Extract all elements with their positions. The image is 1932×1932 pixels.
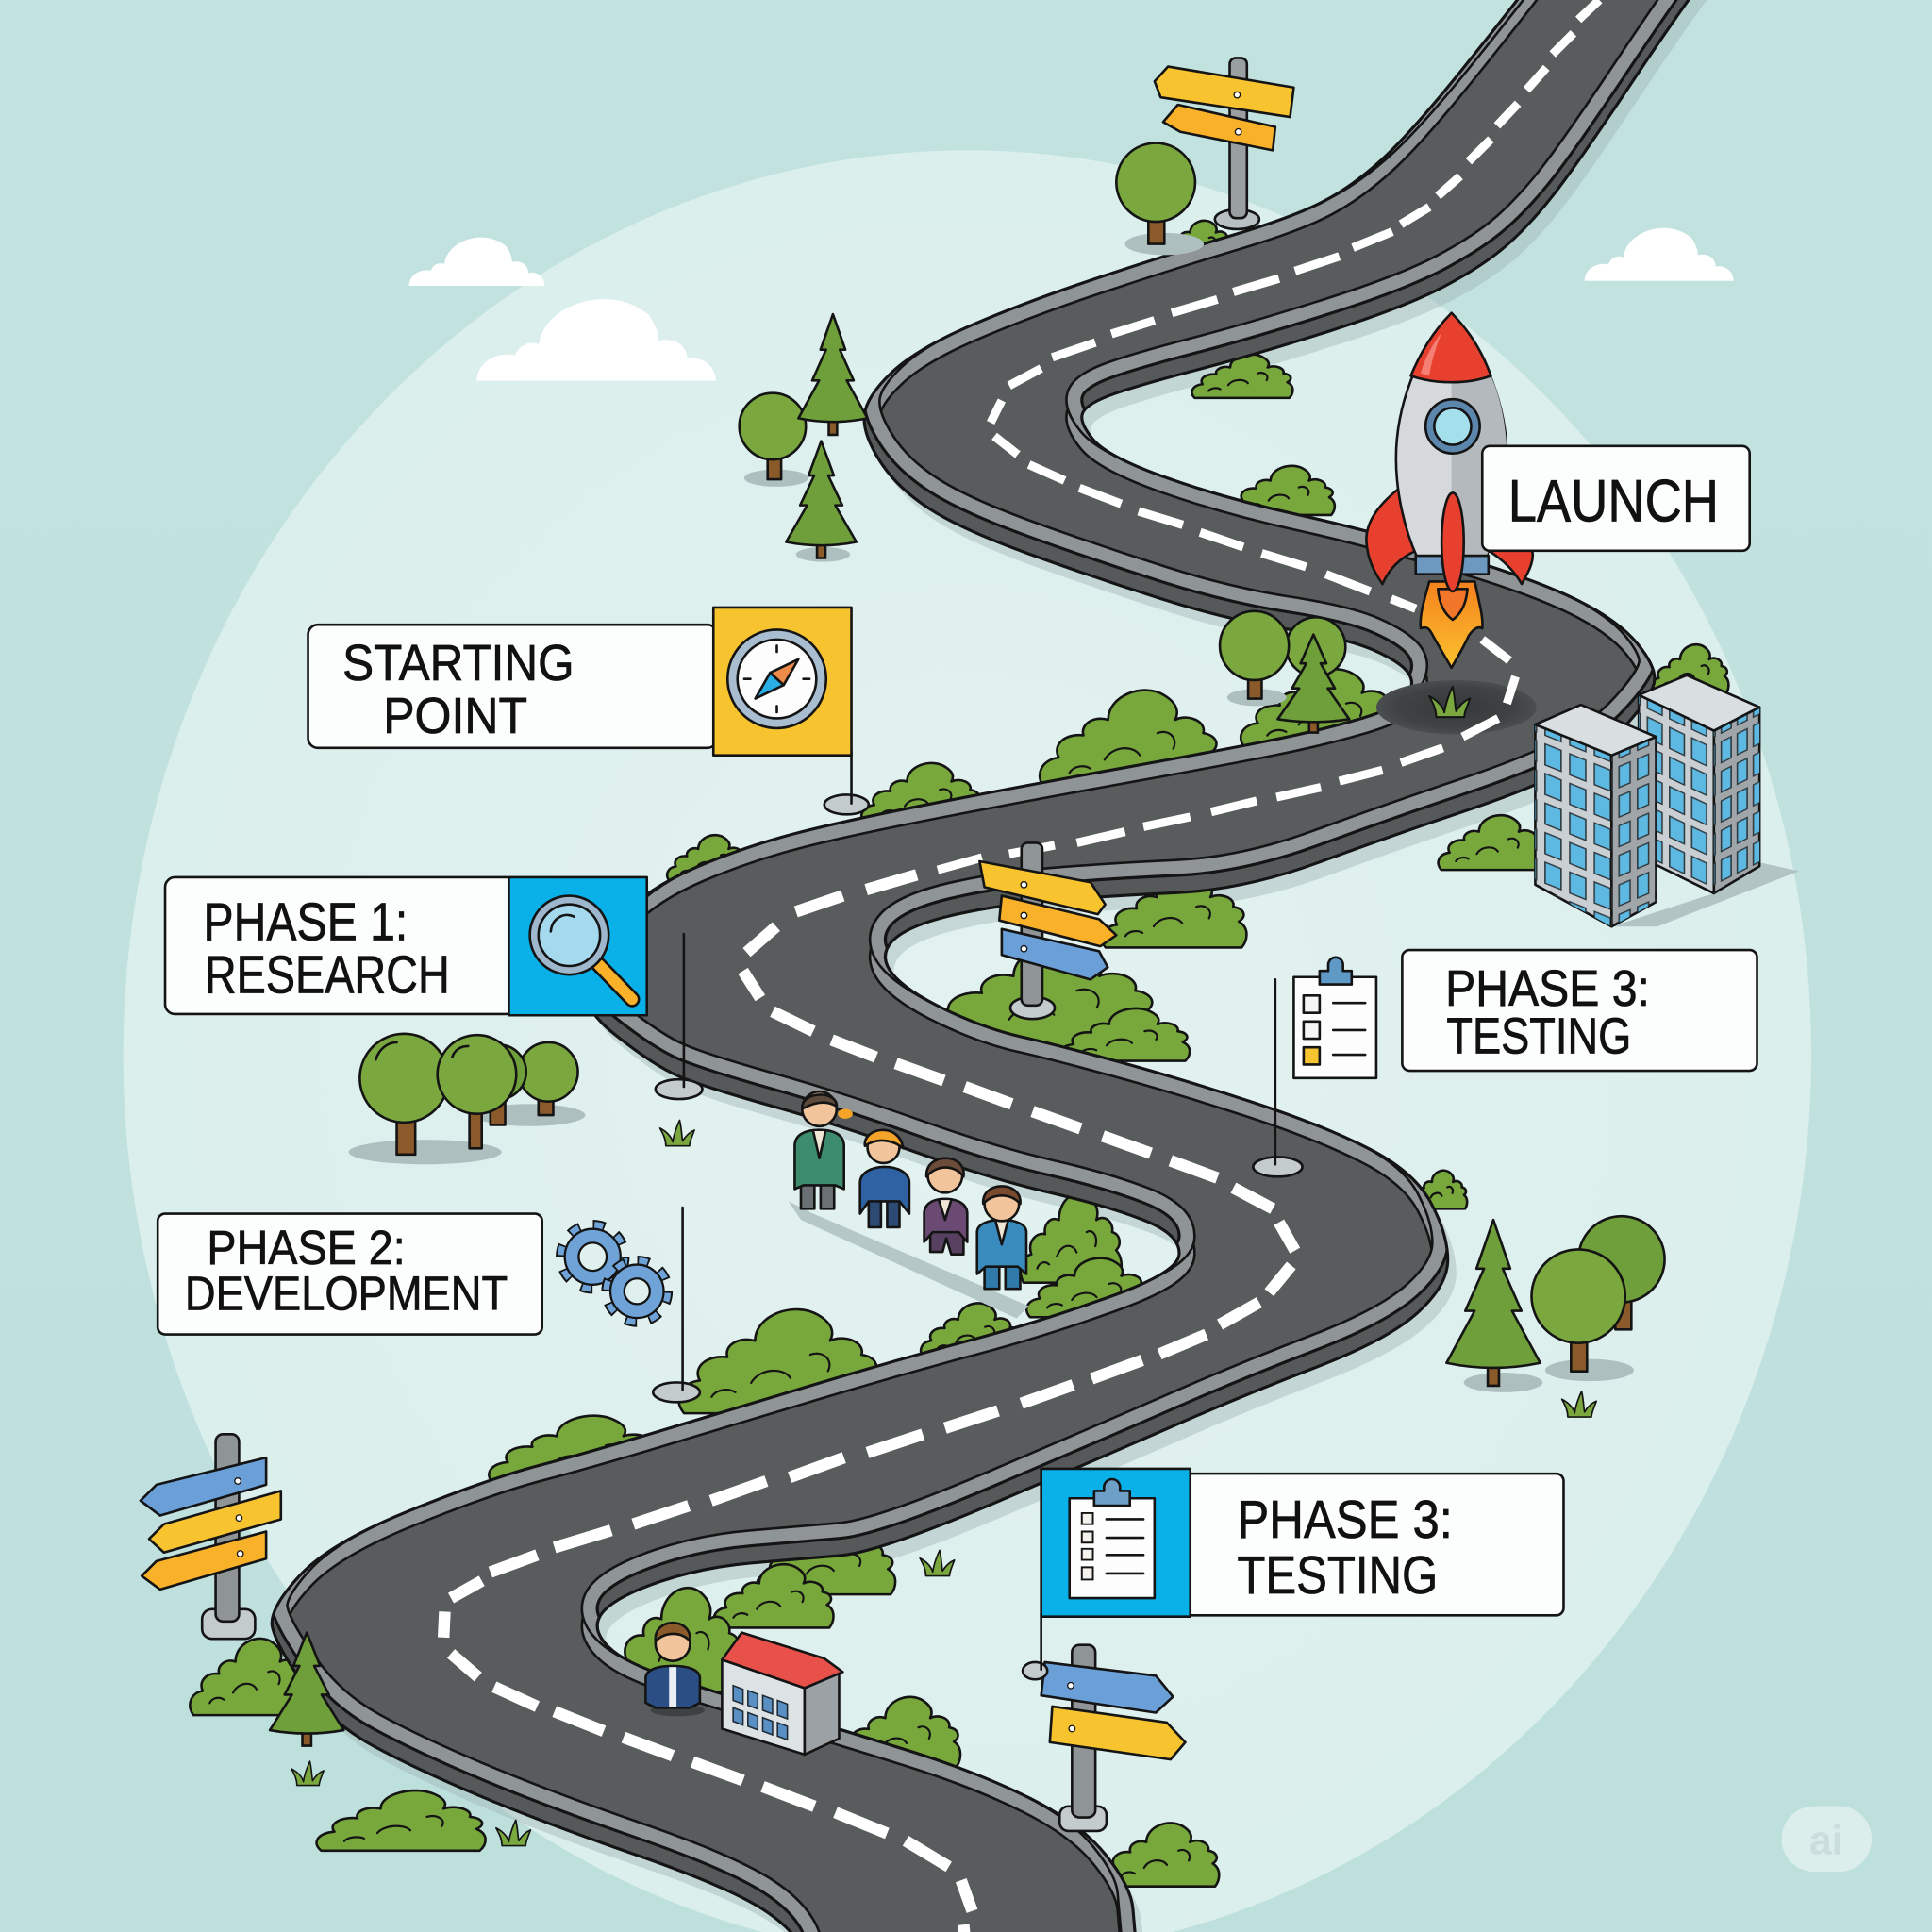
label: Launch: LAUNCH: [1508, 468, 1719, 534]
label: Phase 3 Testing lower: TESTING: [1237, 1545, 1438, 1605]
icon: clipboard lower: [1070, 1479, 1155, 1598]
person near house: [645, 1623, 705, 1716]
watermark: [1782, 1807, 1872, 1872]
heading: phase 1: [204, 892, 450, 1005]
buildings: [1535, 675, 1799, 926]
road outline: [272, 0, 1725, 1932]
flame: [1421, 581, 1482, 668]
heading: starting point: POINT: [383, 689, 527, 744]
side wall: [272, 0, 1725, 1932]
building shadow: [1611, 862, 1799, 926]
centre dashes upper: [938, 0, 1599, 870]
icon: compass: [727, 629, 826, 728]
team: person 1: [794, 1091, 853, 1208]
rocket: [1366, 313, 1533, 668]
rocket shadow on road: [1376, 680, 1537, 734]
label: Phase 2 Development: DEVELOPMENT: [185, 1266, 508, 1320]
tree: bottom left pine: [270, 1633, 343, 1746]
label: Phase 3 Testing lower: [1041, 1469, 1563, 1617]
label: Phase 3 Testing right: PHASE 3:: [1445, 961, 1650, 1017]
cloud: upper left large: [476, 299, 716, 381]
icon: clipboard right: [1293, 958, 1376, 1078]
flag: blue: [508, 877, 647, 1015]
icon: magnifier: [530, 896, 632, 999]
flame core: [1438, 589, 1468, 620]
signpost: top: [1155, 58, 1293, 229]
heading: starting point: [342, 636, 575, 744]
trees: mid road: [1220, 611, 1349, 733]
centre fin: [1441, 492, 1464, 591]
bushes behind the road: [190, 221, 1728, 1887]
front building: [1535, 705, 1656, 926]
label: Phase 3 Testing right: TESTING: [1446, 1009, 1631, 1065]
trees: right group: [1446, 1216, 1665, 1392]
centre dashes lower: [443, 874, 1295, 1932]
trees: left group: [349, 1034, 585, 1164]
people shadow: [789, 1201, 1029, 1319]
winding road: [272, 0, 1725, 1932]
trees: group near first bend: [740, 314, 868, 562]
small house: [722, 1633, 842, 1755]
flag: yellow: [713, 608, 852, 756]
house windows: [733, 1686, 788, 1740]
label: Starting Point: [308, 608, 852, 756]
right fin: [1485, 518, 1533, 584]
heading: phase 1: PHASE 1:: [204, 892, 408, 952]
label: Phase 3 Testing lower: PHASE 3:: [1237, 1490, 1453, 1549]
porthole glass: [1434, 408, 1472, 445]
flag: blue: [1041, 1469, 1191, 1617]
label: Phase 3 Testing right: [1402, 950, 1757, 1071]
trees: top: [1116, 143, 1204, 255]
label: Launch: [1482, 446, 1750, 551]
cloud: upper right: [1585, 228, 1734, 281]
grass tufts: [291, 687, 1596, 1846]
body shade: [1452, 375, 1507, 557]
cloud: upper left small: [409, 238, 544, 286]
label: Phase 2 Development: [158, 1214, 542, 1335]
road shadow: [280, 0, 1734, 1932]
house roof: [722, 1633, 842, 1688]
asphalt surface and shoulder: [272, 0, 1725, 1932]
heading: phase 1: RESEARCH: [205, 945, 450, 1005]
nose cone: [1411, 313, 1491, 382]
label: Phase 2 Development: PHASE 2:: [207, 1221, 406, 1274]
house front: [722, 1659, 805, 1755]
signpost: left: [141, 1434, 281, 1639]
back building: [1639, 675, 1759, 893]
label: Phase 1 Research: [165, 877, 647, 1015]
house side: [805, 1674, 839, 1755]
porthole: [1425, 399, 1480, 454]
left fin: [1366, 488, 1416, 584]
icon: gears: [563, 1227, 665, 1320]
watermark: ai: [1809, 1819, 1843, 1864]
signpost: centre: [979, 842, 1116, 1019]
team: person 2: [860, 1130, 909, 1227]
nose highlight: [1421, 333, 1441, 375]
rocket body: [1396, 313, 1507, 557]
heading: starting point: STARTING: [342, 636, 575, 691]
signpost: bottom right: [1041, 1645, 1185, 1831]
team: person 4: [977, 1186, 1026, 1289]
team: person 3: [924, 1158, 967, 1255]
collar: [1416, 556, 1489, 575]
flag poles and bases: [653, 752, 1303, 1679]
